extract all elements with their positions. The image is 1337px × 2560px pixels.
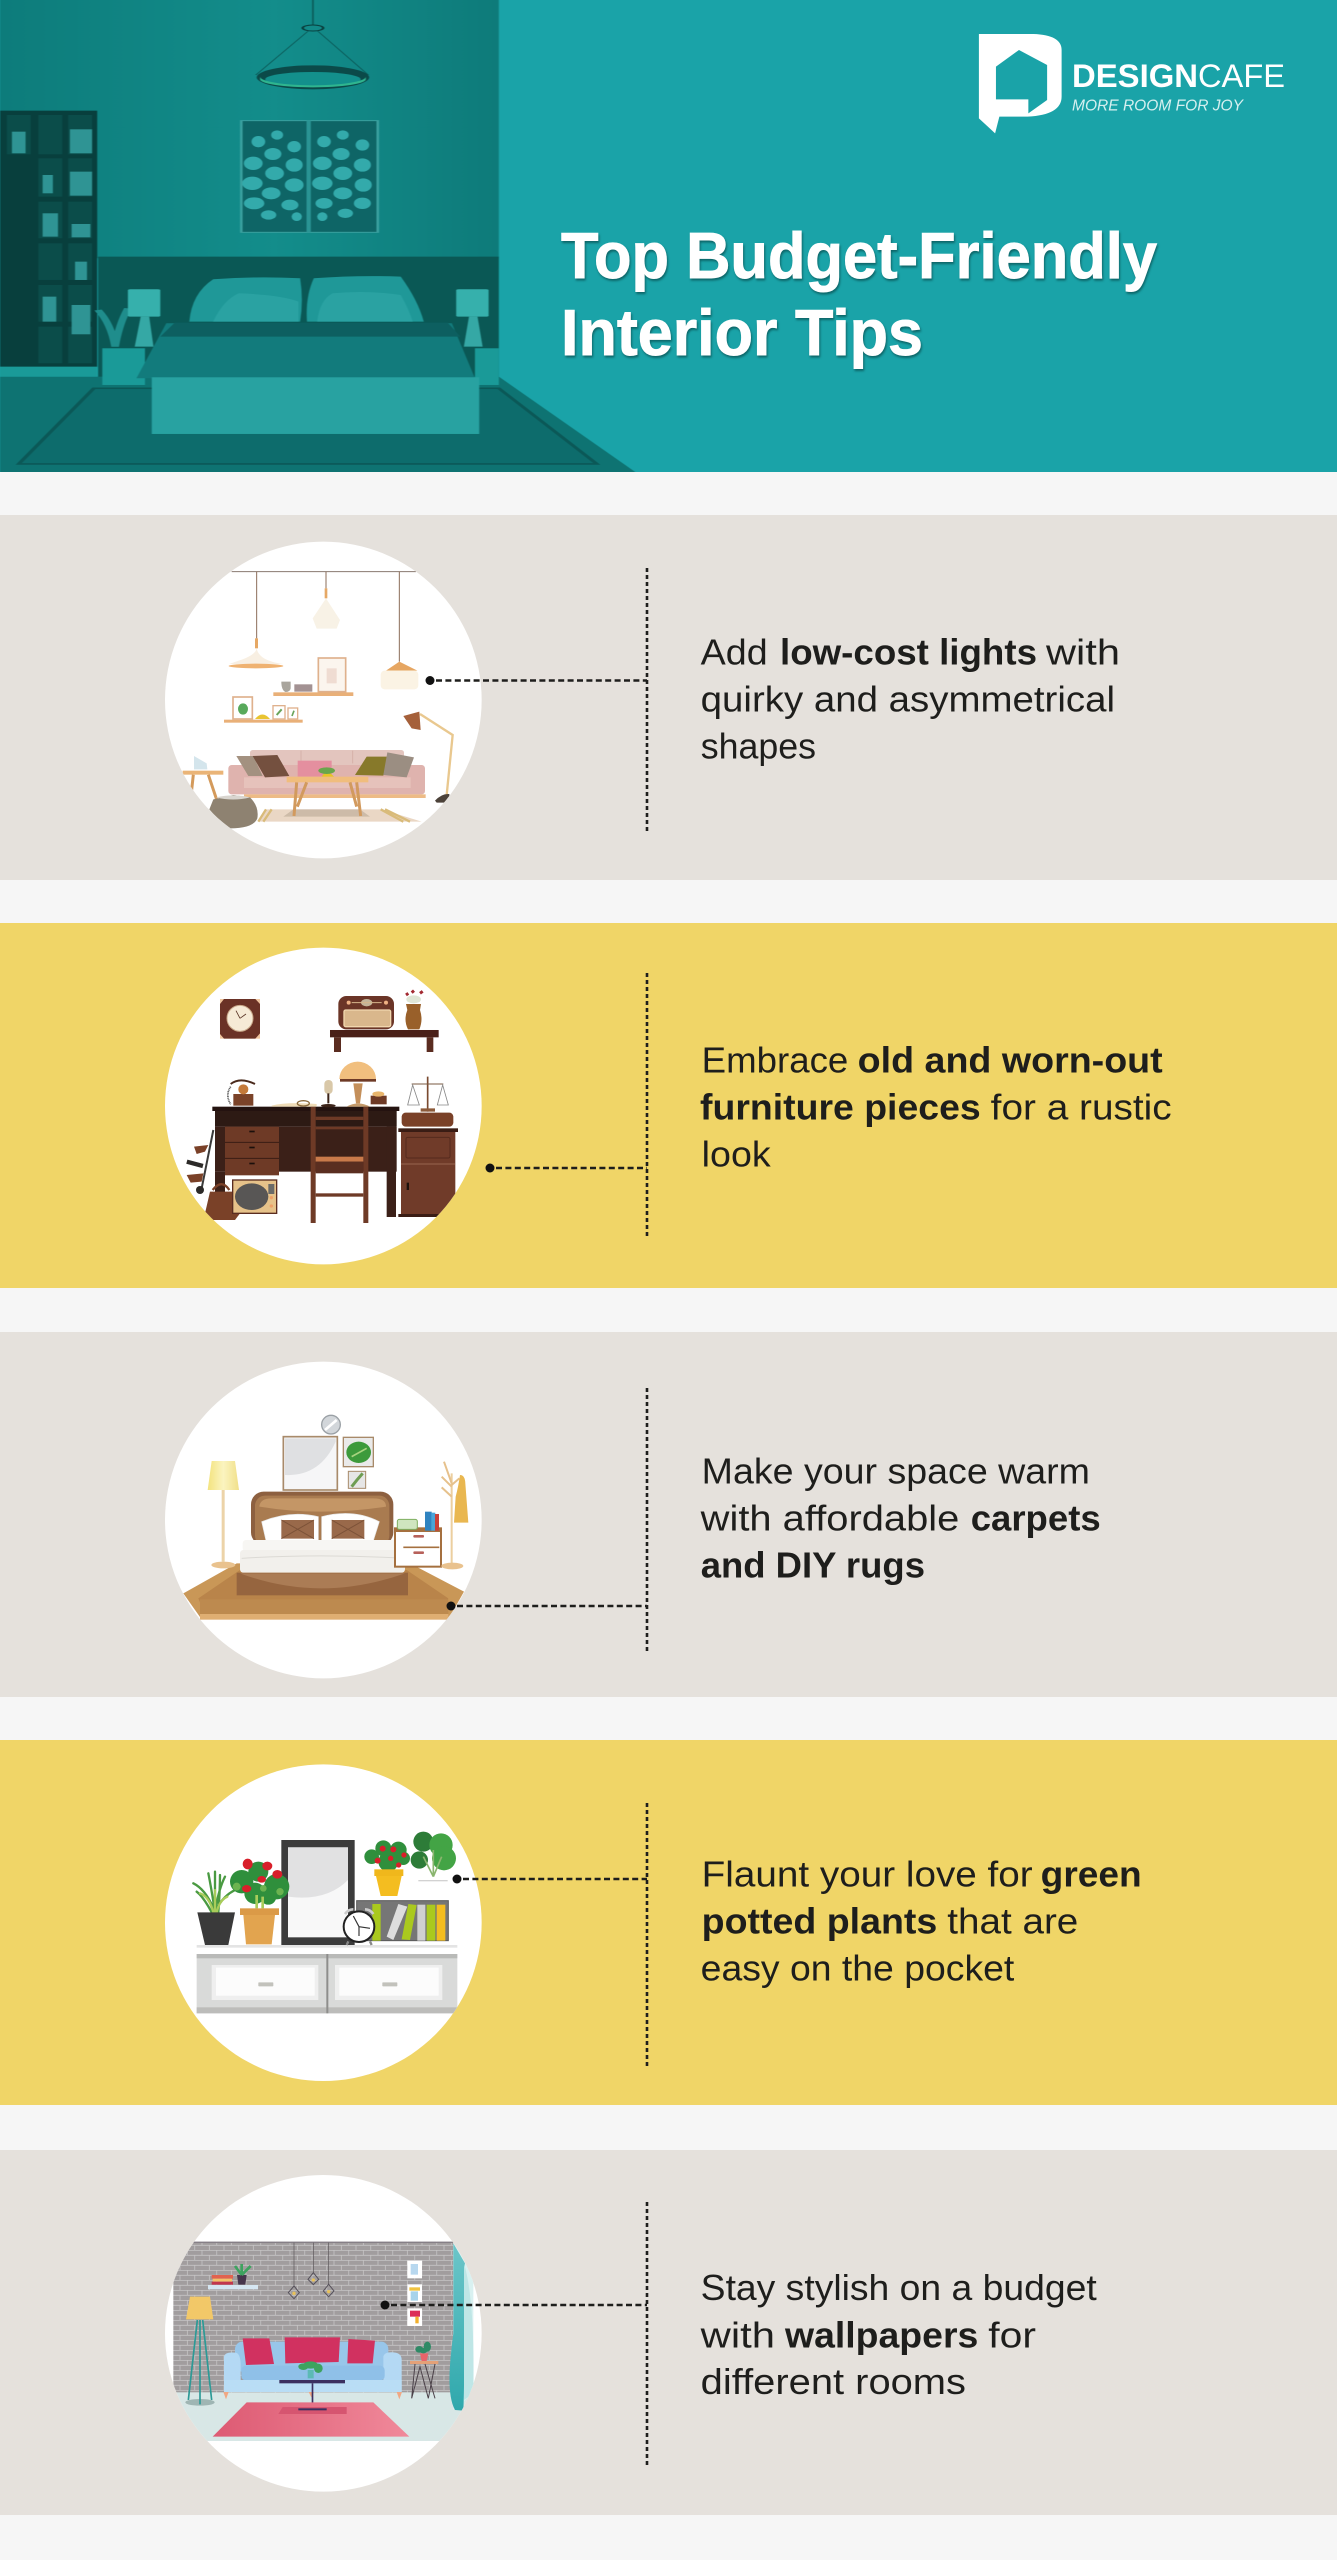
- title: Top Budget-Friendly: [561, 219, 1157, 292]
- connector: dotted callout: [452, 1803, 647, 2068]
- tip 1 text: [701, 631, 1120, 766]
- icon: bedroom with carpet: [165, 1362, 482, 1678]
- tip 2 text: look: [702, 1134, 771, 1175]
- tip 3 text: and DIY rugs: [701, 1544, 925, 1585]
- tip 4 text: easy on the pocket: [701, 1948, 1014, 1989]
- tip 1 text: shapes: [701, 725, 816, 766]
- tip 4 text: that are: [947, 1900, 1078, 1941]
- tip 4 text: potted plants: [702, 1900, 937, 1941]
- tip 5 text: different rooms: [701, 2361, 966, 2402]
- logo tagline: MORE ROOM FOR JOY: [1072, 98, 1245, 114]
- panel: tip 2 old furniture: [0, 923, 1337, 1288]
- tip 5 text: wallpapers: [784, 2314, 978, 2355]
- tip 3 text: Make your space warm: [702, 1450, 1090, 1491]
- tip 5 text: with: [700, 2314, 775, 2355]
- bedroom photo with teal overlay: [0, 0, 635, 472]
- teal header background: [0, 0, 1337, 472]
- logo mark: [979, 34, 1062, 133]
- tip 3 text: [700, 1450, 1101, 1585]
- tip 3 text: with affordable: [700, 1498, 959, 1539]
- tip 5 text: Stay stylish on a budget: [701, 2267, 1097, 2308]
- tip 2 text: [700, 1040, 1172, 1175]
- tip 2 text: Embrace: [702, 1040, 848, 1081]
- logo wordmark second part: CAFE: [1198, 58, 1285, 94]
- tip 2 text: furniture pieces: [700, 1086, 981, 1127]
- panel: tip 4 potted plants: [0, 1740, 1337, 2105]
- connector: dotted callout: [446, 1388, 647, 1652]
- title: Interior Tips: [561, 296, 923, 369]
- tip 1 text: Add: [701, 631, 768, 672]
- connector: dotted callout: [486, 973, 647, 1238]
- panel: tip 5 wallpapers: [0, 2150, 1337, 2515]
- connector: dotted callout: [426, 568, 647, 833]
- tip 2 text: for a rustic: [991, 1086, 1172, 1127]
- tip 4 text: green: [1041, 1854, 1142, 1895]
- tip 5 text: [700, 2267, 1097, 2402]
- header banner: [0, 0, 1337, 472]
- logo wordmark: DESIGN: [1072, 58, 1198, 94]
- connector: dotted callout: [380, 2202, 647, 2465]
- icon: potted plants on cabinet: [165, 1764, 482, 2081]
- tip 4 text: [701, 1854, 1142, 1989]
- title: [561, 219, 1157, 369]
- icon: living room with brick wallpaper: [165, 2175, 482, 2492]
- panel: tip 3 carpets and rugs: [0, 1332, 1337, 1697]
- panel: tip 1 low-cost lights: [0, 515, 1337, 880]
- tip 2 text: old and worn-out: [858, 1040, 1163, 1081]
- tip 1 text: low-cost lights: [780, 631, 1037, 672]
- tip 1 text: quirky and asymmetrical: [701, 679, 1115, 720]
- logo: [979, 34, 1285, 133]
- tip 1 text: with: [1045, 631, 1120, 672]
- icon: living room with pendant lights: [165, 542, 482, 858]
- tip 4 text: Flaunt your love for: [702, 1854, 1033, 1895]
- tip 5 text: for: [988, 2314, 1036, 2355]
- tip 3 text: carpets: [971, 1498, 1101, 1539]
- icon: vintage desk scene: [165, 948, 482, 1264]
